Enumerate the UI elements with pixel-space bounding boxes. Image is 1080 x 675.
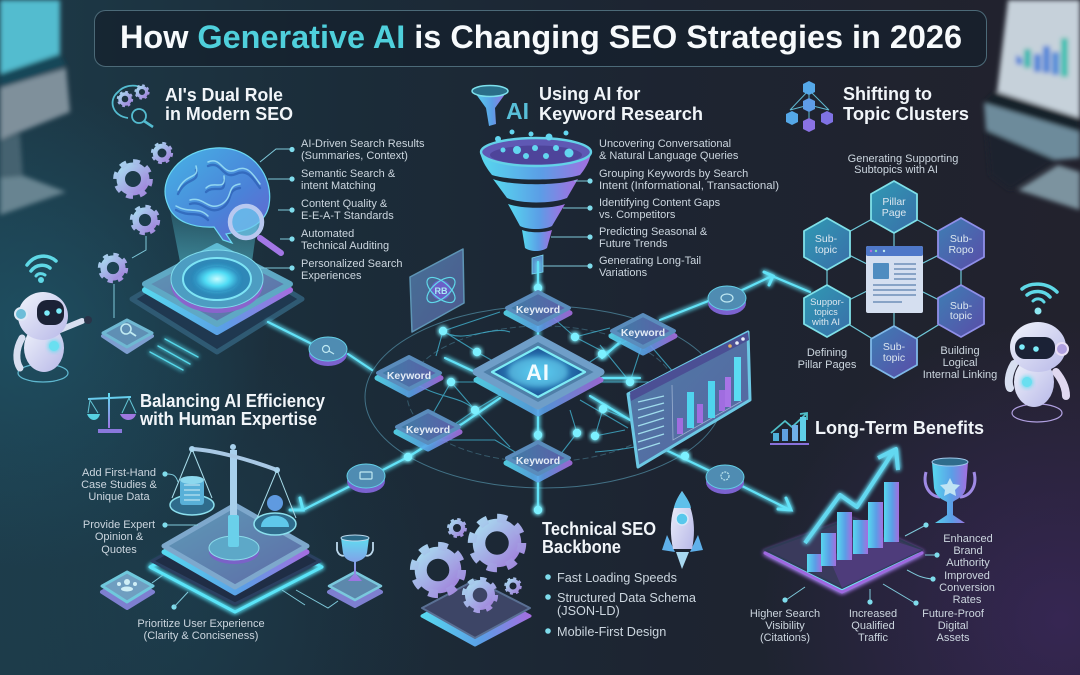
- connectors and labels: Brand: [953, 545, 983, 557]
- decor lines: [150, 339, 198, 370]
- small RB panel: RB: [434, 286, 448, 296]
- list: Predicting Seasonal &: [599, 226, 708, 238]
- hex network: with AI: [811, 317, 840, 328]
- bullets: Structured Data Schema: [557, 591, 697, 605]
- connectors and labels: Authority: [946, 557, 990, 569]
- icon: rocket: [662, 491, 703, 569]
- heading: with Human Expertise: [139, 409, 317, 429]
- panel: AI's dual role: [100, 85, 425, 370]
- heading: Backbone: [542, 537, 621, 557]
- connectors and labels: Conversion: [939, 582, 995, 594]
- icon: trophy: [925, 458, 975, 523]
- AI label: AI: [526, 360, 550, 385]
- keyword tiles: [377, 292, 675, 480]
- icon: hex tree: [786, 81, 833, 132]
- connectors and labels: Unique Data: [88, 491, 150, 503]
- list: Grouping Keywords by Search: [599, 168, 748, 180]
- left pan with database: [170, 476, 214, 515]
- keyword tiles: Keyword: [387, 370, 431, 382]
- connectors and labels: [750, 522, 995, 644]
- list: Automated: [301, 228, 354, 240]
- heading: Topic Clusters: [843, 104, 969, 124]
- connectors and labels: Digital: [938, 620, 968, 632]
- blurred monitor right: [984, 0, 1080, 210]
- heading: [843, 84, 969, 124]
- captions bottom: Defining: [807, 347, 847, 359]
- caption top: [848, 153, 958, 176]
- heading: Balancing AI Efficiency: [140, 391, 325, 411]
- platform: [765, 518, 922, 592]
- icon: wifi: [27, 256, 56, 283]
- platform with glowing core: [132, 190, 302, 352]
- icon: search tile: [103, 320, 152, 352]
- icon: funnel AI: [472, 86, 529, 126]
- captions bottom: Internal Linking: [923, 369, 997, 381]
- main glowing links: [268, 262, 810, 510]
- keyword tiles: Keyword: [621, 327, 665, 339]
- caption top: Generating Supporting: [848, 153, 958, 165]
- bullets: Fast Loading Speeds: [557, 571, 677, 585]
- heading: Long-Term Benefits: [815, 418, 984, 438]
- icon: users tile: [102, 572, 153, 608]
- big funnel: [480, 130, 591, 274]
- blurred monitor left: [0, 0, 70, 215]
- platform: [422, 580, 530, 645]
- bullets: [545, 571, 697, 639]
- bullets: Mobile-First Design: [557, 625, 666, 639]
- chart panel: [628, 332, 750, 467]
- icon: wifi: [1022, 284, 1057, 314]
- icon: funnel AI: AI: [506, 98, 529, 124]
- round connector nodes: [309, 286, 746, 494]
- list: Uncovering Conversational: [599, 138, 731, 150]
- right pan with person: [254, 495, 296, 535]
- panel: topic clusters: [786, 81, 997, 381]
- list: Experiences: [301, 270, 362, 282]
- heading: Shifting to: [843, 84, 932, 104]
- hex network: Suppor-: [810, 297, 844, 308]
- heading: Technical SEO: [542, 519, 656, 539]
- connectors and labels: Traffic: [858, 632, 888, 644]
- heading: [139, 391, 325, 429]
- robot left: [15, 256, 92, 382]
- list: intent Matching: [301, 180, 376, 192]
- list: Technical Auditing: [301, 240, 389, 252]
- connectors and labels: Qualified: [851, 620, 895, 632]
- list: & Natural Language Queries: [599, 150, 739, 162]
- captions bottom: Pillar Pages: [798, 359, 857, 371]
- connectors and labels: Assets: [936, 632, 970, 644]
- heading: Using AI for: [539, 84, 640, 104]
- hex network: Sub-: [883, 341, 906, 353]
- connectors and labels: Provide Expert: [83, 519, 155, 531]
- heading: in Modern SEO: [165, 104, 293, 124]
- connectors and labels: Future-Proof: [922, 608, 985, 620]
- list: [543, 138, 779, 279]
- robot right: [1009, 284, 1068, 422]
- small RB panel: [410, 249, 464, 332]
- panel: technical SEO: [414, 491, 703, 645]
- icon: brain gears and search: [113, 86, 153, 127]
- list: vs. Competitors: [599, 209, 676, 221]
- connectors and labels: Improved: [944, 570, 990, 582]
- keyword tiles: Keyword: [516, 455, 560, 467]
- bars: [807, 482, 899, 572]
- list: (Summaries, Context): [301, 150, 408, 162]
- list: Intent (Informational, Transactional): [599, 180, 779, 192]
- hex network: topic: [883, 352, 905, 364]
- hex network: Sub-: [950, 300, 973, 312]
- list: Semantic Search &: [301, 168, 396, 180]
- connectors and labels: Prioritize User Experience: [137, 618, 265, 630]
- list: [260, 138, 425, 282]
- hex network: Pillar: [882, 196, 906, 208]
- captions bottom: [798, 345, 997, 381]
- connectors and labels: Visibility: [765, 620, 805, 632]
- keyword tiles: Keyword: [406, 424, 450, 436]
- connectors and labels: Enhanced: [943, 533, 993, 545]
- hex network: topics: [814, 307, 838, 317]
- orbit rings: [365, 306, 723, 488]
- icon: magnifier: [230, 206, 281, 253]
- icons: gears: [100, 144, 172, 318]
- connectors and labels: Quotes: [101, 544, 137, 556]
- hex network: Sub-: [815, 233, 838, 245]
- heading: Keyword Research: [539, 104, 703, 124]
- list: Generating Long-Tail: [599, 255, 701, 267]
- list: Variations: [599, 267, 648, 279]
- hex network: topic: [815, 244, 837, 256]
- icon: scale: [87, 393, 136, 431]
- hex network: [804, 181, 984, 378]
- list: Content Quality &: [301, 198, 388, 210]
- central network: [268, 262, 810, 514]
- panel: keyword research: [472, 84, 779, 279]
- list: Future Trends: [599, 238, 668, 250]
- icon: growth chart: [770, 413, 809, 444]
- hex network: topic: [950, 310, 972, 322]
- icon: brain: [165, 148, 270, 243]
- captions bottom: Building: [940, 345, 980, 357]
- list: E-E-A-T Standards: [301, 210, 394, 222]
- AI chip: [476, 338, 601, 414]
- connectors and labels: [81, 467, 338, 642]
- heading: [539, 84, 703, 124]
- heading: [165, 85, 293, 124]
- connectors and labels: (Citations): [760, 632, 810, 644]
- captions bottom: Logical: [943, 357, 977, 369]
- network nodes: [404, 284, 689, 514]
- heading: AI's Dual Role: [165, 85, 283, 105]
- icons: gears: [414, 518, 522, 610]
- scale: [170, 444, 296, 564]
- hex network: Ropo: [948, 244, 974, 256]
- keyword tiles: Keyword: [516, 304, 560, 316]
- connectors and labels: Opinion &: [95, 531, 144, 543]
- platform: [150, 505, 322, 612]
- list: Identifying Content Gaps: [599, 197, 721, 209]
- connectors and labels: Higher Search: [750, 608, 820, 620]
- list: AI-Driven Search Results: [301, 138, 425, 150]
- connectors and labels: Add First-Hand: [82, 467, 156, 479]
- panel: balancing: [81, 391, 381, 642]
- hex network: Sub-: [950, 233, 973, 245]
- panel: long-term benefits: [750, 413, 995, 644]
- connectors and labels: Case Studies &: [81, 479, 158, 491]
- bullets: (JSON-LD): [557, 604, 620, 618]
- hex network: Page: [882, 207, 906, 219]
- title bar: [94, 10, 986, 66]
- connectors and labels: Rates: [953, 594, 982, 606]
- connectors: [408, 312, 680, 457]
- icon: trophy tile: [329, 535, 381, 606]
- growth arrow: [805, 449, 898, 543]
- heading: [542, 519, 656, 557]
- caption top: Subtopics with AI: [854, 164, 938, 176]
- title text: How Generative AI is Changing SEO Strategies in 2026: [120, 19, 962, 55]
- connectors and labels: (Clarity & Conciseness): [144, 630, 258, 642]
- list: Personalized Search: [301, 258, 403, 270]
- connectors and labels: Increased: [849, 608, 897, 620]
- document icon: [866, 246, 923, 313]
